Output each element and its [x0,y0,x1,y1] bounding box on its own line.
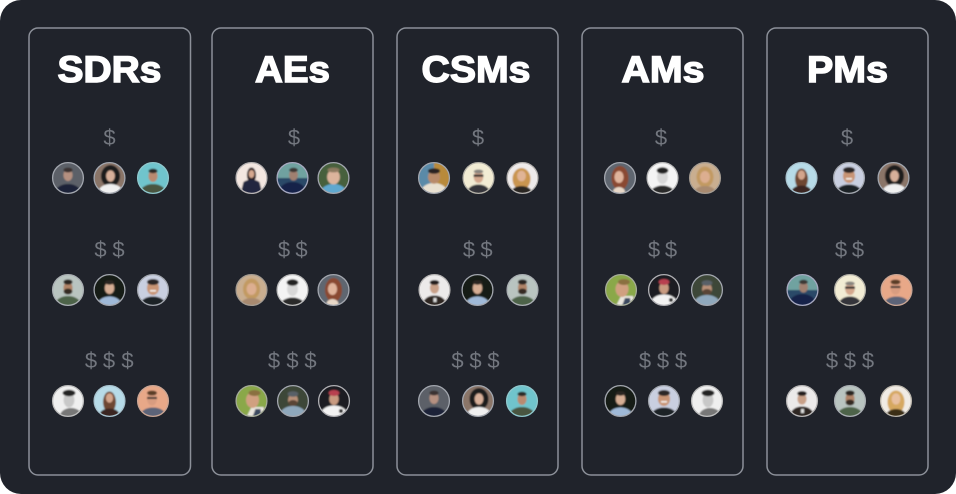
tier 3 price: $ [469,348,482,373]
tier 3 avatars [236,385,350,424]
panel: AMs [582,28,743,475]
tier 1 avatars [604,162,721,200]
tier 3 price [451,348,500,373]
tier 3 avatars [52,385,169,424]
tier 3 price [85,348,134,373]
panel: CSMs [397,28,558,475]
tier 2 price: $ [295,237,308,262]
tier 1 price: $ [841,125,853,150]
tier 3 price [639,348,687,373]
tier 3 price: $ [103,348,115,373]
heading: CSMs: CSMs [422,49,530,90]
tier 1 price: $ [472,125,484,150]
tier 2 price: $ [835,237,847,262]
tier 2 price [278,237,308,262]
tier 1 price: $ [288,125,300,150]
tier 2 avatars [52,274,169,314]
heading: PMs: PMs [807,49,888,90]
tier 2 price: $ [94,237,107,262]
panel: PMs [767,28,928,475]
tier 3 avatars [786,385,912,425]
tier 1 avatars [236,162,350,202]
tier 3 price: $ [487,348,500,373]
tier 3 price: $ [121,348,134,373]
tier 3 price: $ [304,348,317,373]
tier 3 price: $ [844,348,856,373]
tier 1 avatars [52,162,169,202]
tier 2 price: $ [112,237,125,262]
tier 3 price: $ [657,348,669,373]
heading: SDRs: SDRs [58,49,162,90]
tier 2 avatars [418,274,538,314]
tier 3 price: $ [286,348,299,373]
tier 3 price: $ [862,348,874,373]
heading: AMs: AMs [622,49,704,90]
tier 1 price: $ [655,125,667,150]
tier 3 price [268,348,317,373]
panel: AEs [212,28,373,475]
tier 2 price: $ [480,237,493,262]
tier 3 price: $ [826,348,838,373]
tier 2 avatars [786,274,912,314]
tier 2 price [94,237,125,262]
tier 1 avatars [786,162,910,202]
tier 2 price [463,237,493,262]
tier 3 price: $ [675,348,687,373]
tier 2 price [835,237,864,262]
tier 2 price: $ [278,237,290,262]
tier 2 avatars [605,274,723,313]
tier 2 price: $ [852,237,864,262]
tier 3 price [826,348,874,373]
tier 3 price: $ [85,348,97,373]
panel: SDRs [29,28,190,475]
tier 3 price: $ [639,348,651,373]
tier 2 price: $ [648,237,660,262]
tier 2 avatars [236,274,350,312]
tier 2 price: $ [463,237,475,262]
tier 2 price [648,237,677,262]
tier 1 price: $ [103,125,116,150]
tier 3 avatars [418,385,538,425]
tier 1 avatars [418,162,538,202]
tier 3 avatars [604,385,723,424]
tier 3 price: $ [451,348,464,373]
heading: AEs: AEs [255,49,330,90]
tier 2 price: $ [665,237,677,262]
tier 3 price: $ [268,348,280,373]
